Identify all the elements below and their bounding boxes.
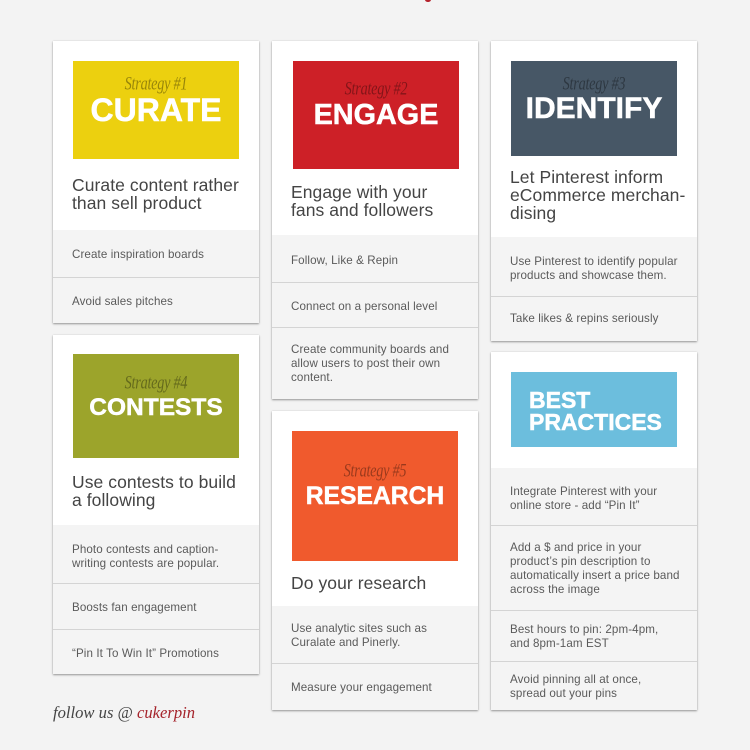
panel: strategy 3 identify — [491, 41, 697, 341]
item: analytic sites: Curalate and Pinerly. — [291, 636, 401, 649]
item: best hours: Best hours to pin: 2pm-4pm, — [510, 623, 658, 636]
item: personal level: Connect on a personal level — [291, 300, 437, 313]
item: price band: automatically insert a price band — [510, 569, 680, 582]
item: analytic sites: Use analytic sites such as — [291, 622, 427, 635]
heading: research: Do your research — [291, 573, 426, 593]
item: integrate: online store - add “Pin It” — [510, 499, 640, 512]
item: measure engagement: Measure your engagement — [291, 681, 432, 694]
banner: best practices — [511, 372, 677, 447]
heading: contests — [72, 472, 236, 510]
panel: strategy 2 engage — [272, 41, 478, 399]
banner: best practices: PRACTICES — [529, 409, 662, 435]
item: inspiration boards: Create inspiration boards — [72, 248, 204, 261]
item: photo contests: writing contests are popular. — [72, 557, 219, 570]
item: community boards — [291, 343, 449, 384]
banner: identify — [511, 61, 677, 156]
item: integrate — [510, 485, 657, 512]
item: follow like repin: Follow, Like & Repin — [291, 254, 398, 267]
banner: engage: ENGAGE — [314, 99, 438, 131]
heading: engage: Engage with your — [291, 182, 427, 202]
heading: curate: than sell product — [72, 193, 202, 213]
item: sales pitches: Avoid sales pitches — [72, 295, 173, 308]
item: popular products: Use Pinterest to identify popular — [510, 255, 678, 268]
banner: engage: Strategy #2 — [345, 78, 407, 99]
heading: identify: eCommerce merchan- — [510, 185, 685, 205]
item: spread out: Avoid pinning all at once, — [510, 673, 641, 686]
heading: contests: a following — [72, 490, 155, 510]
item: price band: product’s pin description to — [510, 555, 651, 568]
footer: follow us: follow us @ cukerpin — [53, 703, 195, 722]
heading: curate — [72, 175, 239, 213]
item: price band: across the image — [510, 583, 600, 596]
panel: strategy 4 contests — [53, 335, 259, 674]
banner: best practices: BEST — [529, 387, 590, 413]
heading: identify — [510, 167, 685, 223]
item: photo contests — [72, 543, 219, 570]
decorative top mark — [425, 0, 431, 2]
item: community boards: Create community boards and — [291, 343, 449, 356]
banner: contests: Strategy #4 — [125, 372, 187, 393]
item: spread out — [510, 673, 641, 700]
panel: strategy 5 research — [272, 411, 478, 710]
item: integrate: Integrate Pinterest with your — [510, 485, 657, 498]
panel: strategy 1 curate — [53, 41, 259, 323]
item: photo contests: Photo contests and caption- — [72, 543, 218, 556]
banner: research: RESEARCH — [306, 483, 444, 510]
item: analytic sites — [291, 622, 427, 649]
banner: research — [292, 431, 458, 561]
item: spread out: spread out your pins — [510, 687, 617, 700]
item: likes and repins: Take likes & repins seriously — [510, 312, 659, 325]
item: best hours: and 8pm-1am EST — [510, 637, 609, 650]
heading: contests: Use contests to build — [72, 472, 236, 492]
banner: curate: CURATE — [91, 92, 221, 128]
item: community boards: content. — [291, 371, 333, 384]
banner: curate — [73, 61, 239, 159]
item: fan engagement: Boosts fan engagement — [72, 601, 197, 614]
panel: best practices — [491, 352, 697, 710]
heading: engage — [291, 182, 433, 220]
heading: identify: Let Pinterest inform — [510, 167, 663, 187]
banner: contests: CONTESTS — [89, 394, 223, 421]
item: community boards: allow users to post their own — [291, 357, 440, 370]
heading: engage: fans and followers — [291, 200, 433, 220]
banner: curate: Strategy #1 — [125, 73, 187, 94]
banner: identify: IDENTIFY — [526, 92, 662, 125]
banner: research: Strategy #5 — [344, 460, 406, 481]
item: popular products — [510, 255, 678, 282]
banner: identify: Strategy #3 — [563, 73, 625, 94]
item: best hours — [510, 623, 658, 650]
item: price band — [510, 541, 680, 596]
item: promotions: “Pin It To Win It” Promotions — [72, 647, 219, 660]
banner: contests — [73, 354, 239, 458]
item: popular products: products and showcase them. — [510, 269, 667, 282]
item: price band: Add a $ and price in your — [510, 541, 641, 554]
banner: engage — [293, 61, 459, 169]
heading: identify: dising — [510, 203, 556, 223]
heading: curate: Curate content rather — [72, 175, 239, 195]
